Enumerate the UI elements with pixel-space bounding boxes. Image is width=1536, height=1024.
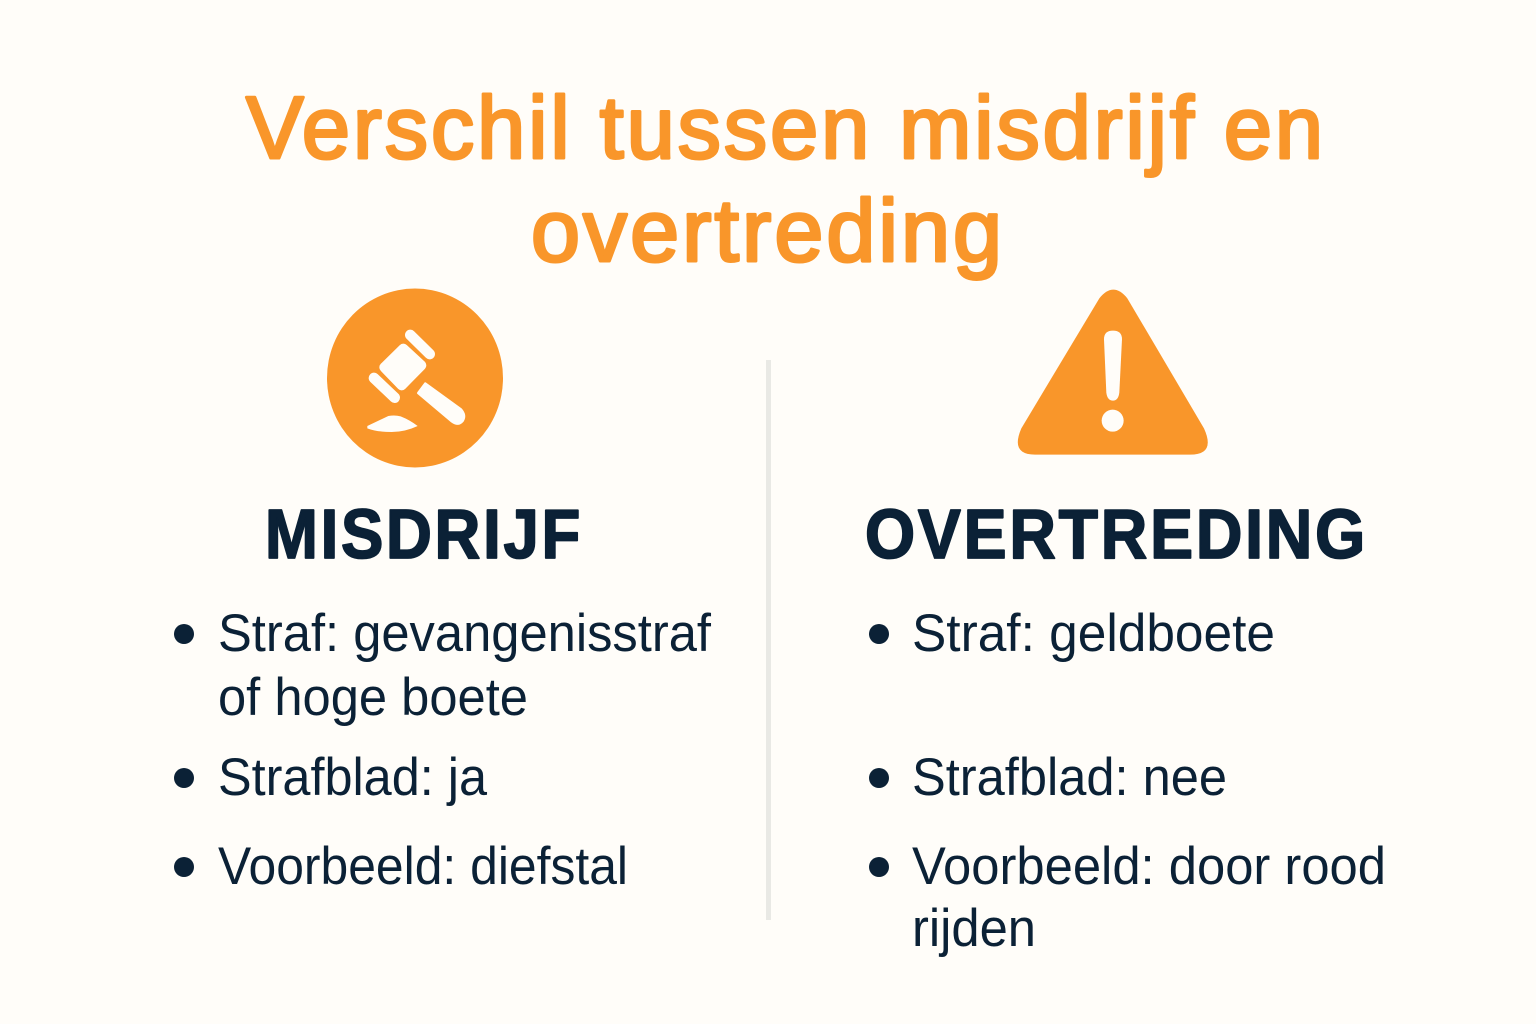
list item: straf: Straf: geldboete	[912, 604, 1275, 663]
list item: straf: of hoge boete	[218, 668, 528, 727]
panel: overtreding	[865, 290, 1386, 958]
list item: voorbeeld: Voorbeeld: door rood	[912, 837, 1386, 896]
list item: voorbeeld	[869, 837, 1386, 958]
icon: warning triangle	[1018, 290, 1208, 455]
list item: voorbeeld: Voorbeeld: diefstal	[218, 837, 628, 896]
heading: overtreding: OVERTREDING	[865, 495, 1368, 573]
title: Verschil tussen misdrijf en	[246, 78, 1326, 177]
panel: misdrijf	[174, 288, 711, 896]
title	[246, 78, 1326, 280]
list item: strafblad: Strafblad: ja	[218, 748, 487, 807]
heading: misdrijf: MISDRIJF	[265, 495, 583, 573]
icon: gavel in orange circle	[327, 288, 503, 468]
list item: strafblad: Strafblad: nee	[912, 748, 1227, 807]
list item: straf	[174, 604, 711, 727]
title: overtreding	[531, 181, 1005, 280]
list item: voorbeeld: rijden	[912, 899, 1036, 958]
list item: straf: Straf: gevangenisstraf	[218, 604, 711, 663]
